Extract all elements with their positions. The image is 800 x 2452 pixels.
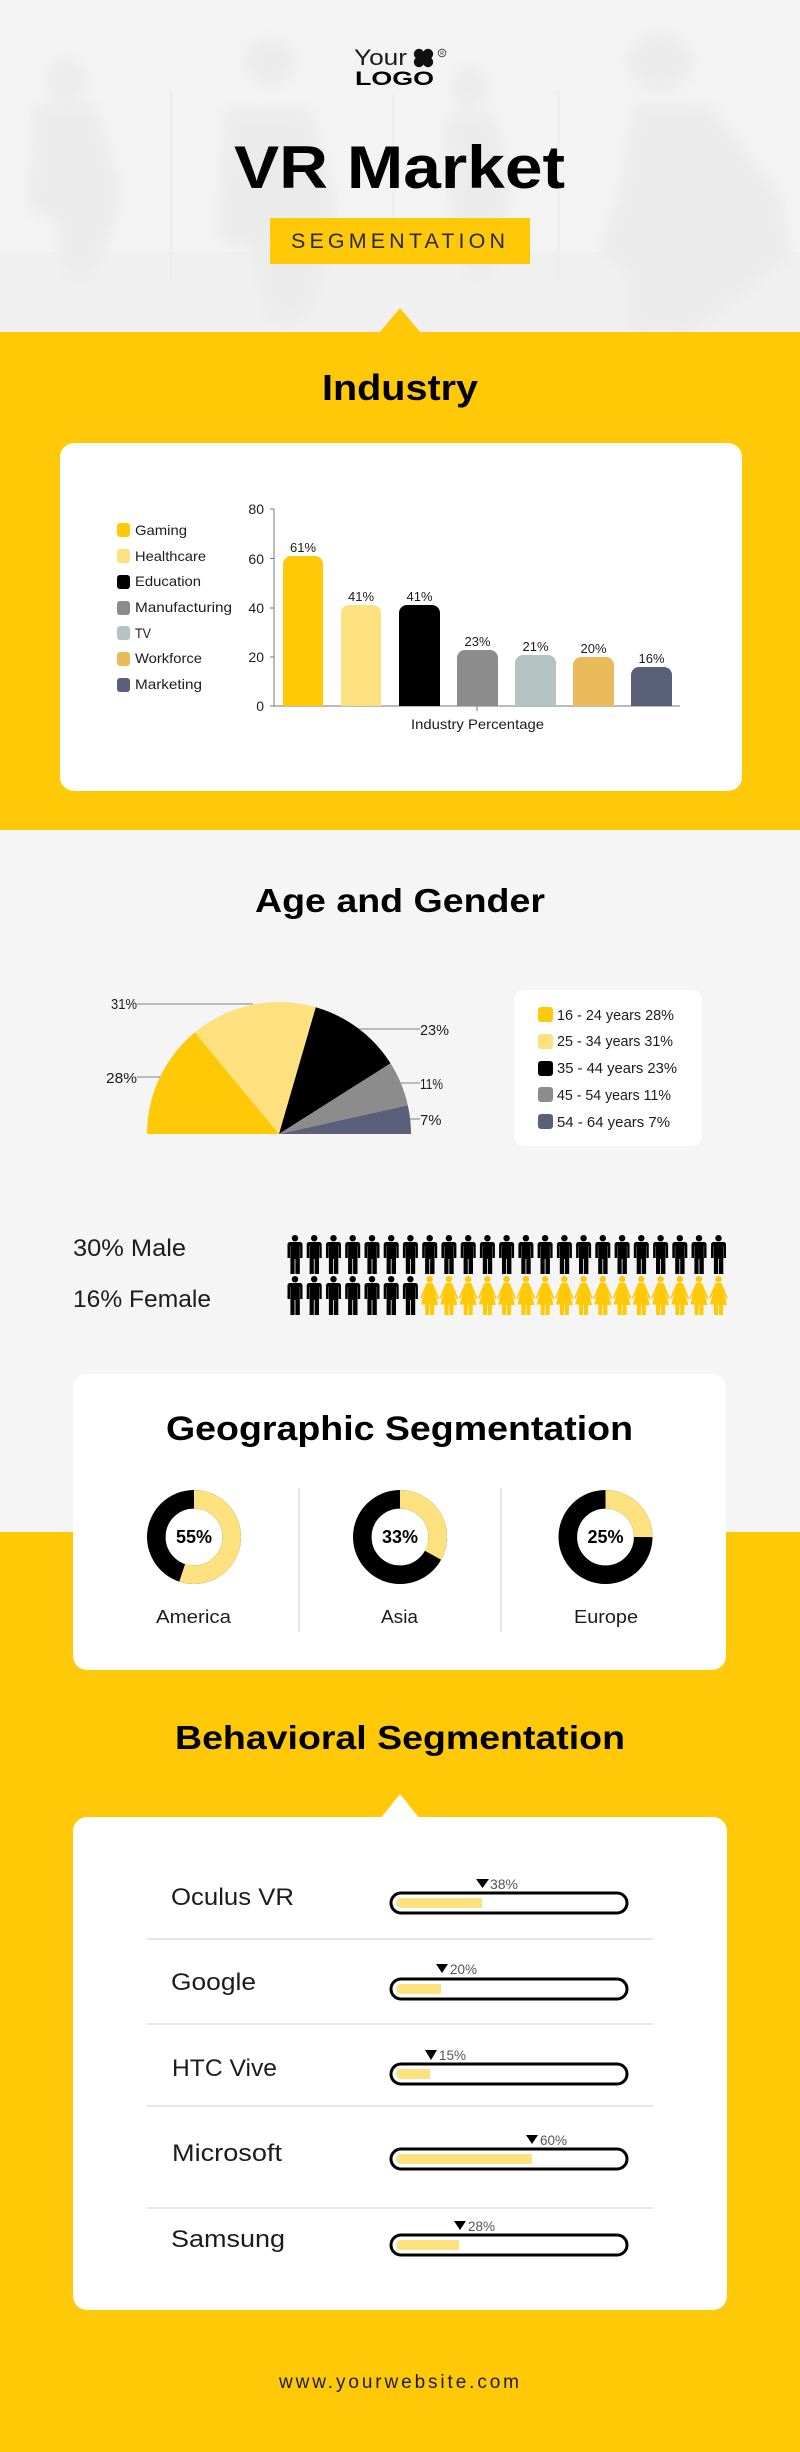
legend: industries: Workforce [135,650,202,666]
bar chart: industry percentage: 40 [248,600,264,616]
row: microsoft [172,2132,627,2169]
pie chart: age: 23% [420,1022,449,1039]
arrow: behavioral pointer [380,1794,420,1819]
legend: age groups: 54 - 64 years 7% [557,1114,670,1131]
pie chart: age [106,996,449,1134]
row: htc vive: 15% [439,2047,466,2063]
subtitle badge: segmentation [270,218,530,264]
donut: america: America [156,1607,232,1627]
donut: asia: 33% [382,1527,418,1547]
donut: asia [362,1499,438,1627]
logo: Your [354,45,407,70]
panel: geographic segmentation [73,1374,726,1670]
row: oculus vr: Oculus VR [171,1884,294,1911]
bar chart: industry percentage: 20 [248,649,264,665]
panel: behavioral segmentation [73,1817,727,2310]
bar chart: industry percentage: 16% [638,651,665,666]
footer: website: www.yourwebsite.com [278,2372,519,2393]
bar chart: industry percentage [248,501,680,732]
legend: age groups: 16 - 24 years 28% [557,1007,674,1024]
legend: age groups: 45 - 54 years 11% [557,1087,671,1104]
donut: europe: 25% [587,1527,624,1547]
legend: industries: Manufacturing [135,599,232,615]
legend: industries: Marketing [135,676,202,692]
row: microsoft: Microsoft [172,2140,282,2167]
title: VR Market [234,134,565,201]
bar chart: industry percentage: Industry Percentage [411,716,544,732]
heading: industry: Industry [322,367,478,408]
heading: age and gender: Age and Gender [255,882,545,919]
legend: industries: Healthcare [135,548,206,564]
arrow: header pointer [380,308,420,332]
bar chart: industry percentage: 0 [256,698,264,714]
row: htc vive: HTC Vive [172,2055,277,2082]
bar chart: industry percentage: 20% [580,641,607,656]
legend: age groups: 35 - 44 years 23% [557,1060,677,1077]
pie chart: age: 31% [111,996,137,1013]
bar chart: industry percentage: 60 [248,551,264,567]
legend: industries: TV [135,625,152,641]
row: oculus vr [171,1876,627,1913]
heading: behavioral segmentation: Behavioral Segmentation [175,1720,625,1757]
logo: LOGO [355,68,434,90]
row: google: Google [171,1969,256,1996]
pie chart: age: 28% [106,1070,137,1087]
legend: age groups [514,990,702,1146]
logo [354,45,446,90]
heading: geographic segmentation: Geographic Segmentation [166,1410,633,1448]
pie chart: age: 11% [420,1076,443,1093]
text: male percentage: 30% Male [73,1235,186,1262]
bar chart: industry percentage: 80 [248,501,264,517]
row: samsung: 28% [468,2218,495,2234]
donut: asia: Asia [381,1607,419,1627]
row: google [171,1961,627,1999]
bar chart: industry percentage: 61% [290,540,316,555]
row: microsoft: 60% [540,2132,567,2148]
bar chart: industry percentage: 21% [522,639,549,654]
legend: industries: Education [135,573,201,589]
bar chart: industry percentage: 23% [464,634,491,649]
bar chart: industry percentage: 41% [406,589,433,604]
donut: europe [568,1499,643,1627]
row: samsung: Samsung [171,2226,285,2253]
panel: industry chart card [60,443,742,791]
row: oculus vr: 38% [490,1876,518,1892]
donut: america [156,1499,232,1627]
legend: age groups: 25 - 34 years 31% [557,1033,673,1050]
legend: industries: Gaming [135,522,187,538]
header: photo background [0,0,800,332]
row: google: 20% [450,1961,477,1977]
text: female percentage: 16% Female [73,1286,211,1313]
row: htc vive [172,2047,627,2084]
donut: america: 55% [176,1527,212,1547]
row: samsung [171,2218,627,2255]
legend: industries [117,522,232,692]
donut: europe: Europe [574,1607,638,1627]
panel: age and gender background [0,830,800,1532]
bar chart: industry percentage: 41% [348,589,374,604]
subtitle badge: segmentation: SEGMENTATION [291,229,505,253]
pictogram: gender people [288,1235,728,1315]
pie chart: age: 7% [420,1112,442,1129]
logo: R [440,51,444,57]
